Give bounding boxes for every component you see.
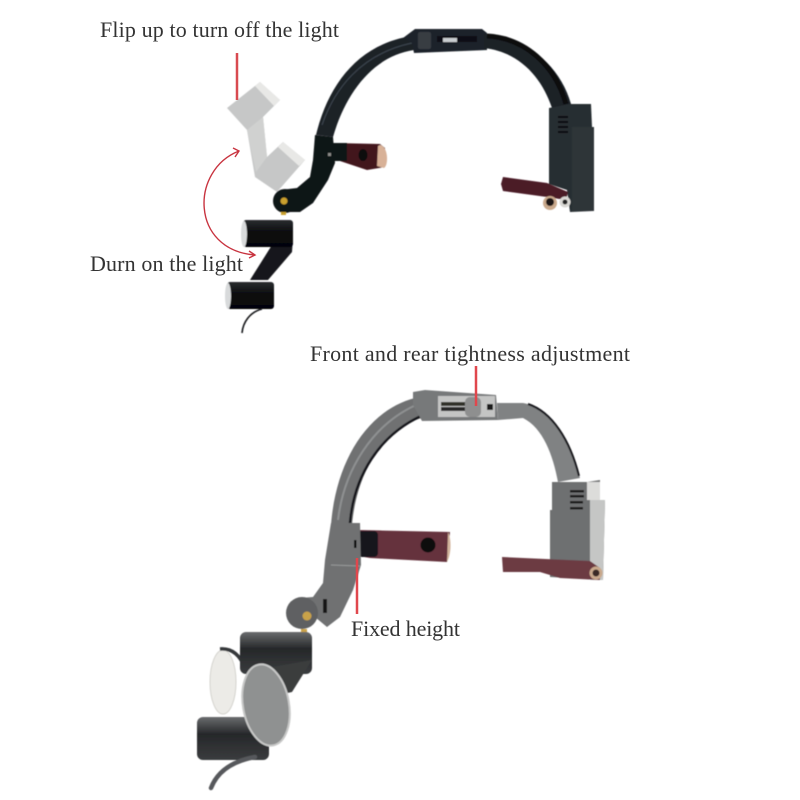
device: top headband, black [225,29,594,333]
right arch [497,403,580,482]
left maroon strap [333,143,385,170]
lower light cylinder [197,717,269,760]
lower light cylinder [227,282,274,309]
lower light arm [250,237,293,280]
hinge body [280,135,335,212]
right maroon strap [501,177,568,200]
label: tightness adjustment: Front and rear tightness adjustment [310,341,630,366]
arrow: tightness pointer [475,366,477,406]
light link [255,660,312,700]
title: flip up label: Flip up to turn off the light [100,17,339,42]
icon: ghosted raised light [227,82,305,192]
label: fixed height: Fixed height [351,616,460,641]
rear lens [210,650,236,714]
upper light cylinder [240,632,312,674]
hinge body [300,523,361,628]
cable [242,309,262,333]
arrow: curved rotation arrow [204,148,255,258]
top slider [403,29,487,53]
clip lever [211,757,255,788]
front lens [236,661,296,749]
arrow: flip up pointer [236,53,238,100]
arrow: fixed height pointer [356,558,358,614]
right arch [484,34,571,108]
side battery box [549,104,594,212]
brass screw [302,612,312,620]
left arch [331,398,422,525]
left arch [316,36,414,137]
upper light cylinder [243,220,293,247]
slider housing [413,390,498,421]
label: turn on: Durn on the light [90,251,243,276]
brass screw [280,198,288,204]
side battery box [550,480,605,580]
device: bottom headband, grey [197,390,605,788]
left maroon strap [358,530,450,562]
right maroon strap [502,557,600,580]
